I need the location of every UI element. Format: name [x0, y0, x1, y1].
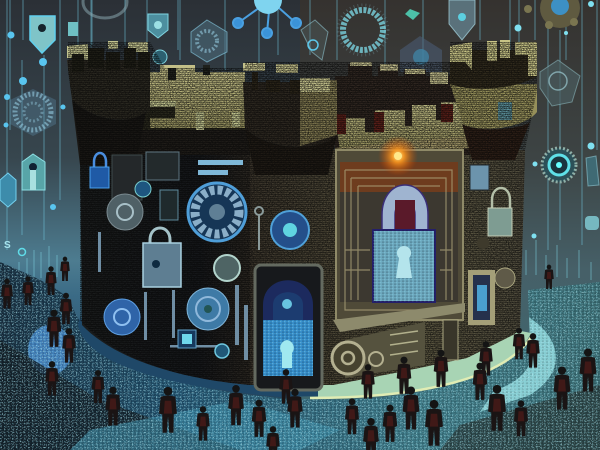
- icon: shield top left: [30, 16, 55, 53]
- icon: cyan gear right: [542, 148, 576, 182]
- icon: dim house hexagon: [400, 36, 442, 72]
- icon: spiral top: [83, 0, 127, 18]
- castle lower wall left: [80, 150, 250, 385]
- platform: castle base: [78, 318, 532, 398]
- left tower: [67, 41, 150, 165]
- icon: emblem top: [405, 9, 420, 20]
- icon: pale gauge: [214, 255, 240, 281]
- icon: ring bottom left: [18, 248, 26, 256]
- castle: fortress structure: [60, 40, 540, 390]
- icon: shield top right: [449, 0, 475, 40]
- icon: cyan network top: [233, 0, 301, 38]
- icon: glowing nodes left: [4, 32, 66, 210]
- icon: mandala left: [10, 89, 56, 136]
- icon: blue disc: [187, 288, 229, 330]
- panel: right wall details: [443, 165, 515, 360]
- skyline bars lower left: [18, 240, 592, 280]
- icon: shields right edge: [585, 156, 599, 230]
- wall upper left: [140, 65, 245, 135]
- icon: big padlock: [373, 185, 435, 302]
- lower wall band under crenels: [82, 130, 250, 155]
- icon: mandala disc: [107, 194, 143, 230]
- icon: left wall padlock blue: [90, 153, 109, 188]
- middle wall upper right: [335, 76, 470, 155]
- icon: blue gear center: [271, 211, 309, 249]
- castle lower wall right: [250, 150, 525, 385]
- icon: orange glow: [378, 136, 418, 176]
- icon: small ring: [215, 344, 229, 358]
- panel: left wall piping: [98, 232, 248, 360]
- icon: grey padlock: [143, 228, 181, 287]
- front crenels right: [335, 102, 468, 150]
- ground: data plaza: [0, 262, 600, 450]
- icon: ring machine: [332, 342, 383, 374]
- icon: letter S: S: [4, 240, 11, 251]
- decorative blue data patch: [28, 325, 72, 375]
- icon: small shield: [68, 22, 78, 36]
- icon: hexagon right: [540, 60, 580, 106]
- icon: hexagon right of ring: [301, 20, 328, 60]
- center tower: [243, 63, 337, 175]
- brick texture: [60, 40, 540, 390]
- icon: wheel gear: [188, 183, 246, 241]
- icon: hexagon top: [191, 20, 227, 62]
- icon: ring small: [153, 50, 167, 64]
- back crenels right: [348, 64, 448, 88]
- people: crowd silhouettes: [1, 257, 596, 450]
- icon: blue disc lower: [104, 299, 140, 335]
- icon: glowing square: [178, 330, 196, 348]
- icon: glowing nodes right: [514, 1, 594, 238]
- icon: small padlock: [488, 188, 512, 236]
- data streams: hanging lines: [7, 0, 597, 250]
- panel: blue door with padlock: [255, 265, 322, 390]
- panel: circuit door with big padlock: [333, 150, 465, 378]
- icon: cyan ring: [338, 5, 388, 55]
- icon: gear top right: [524, 0, 580, 29]
- icon: shield left edge: [0, 173, 16, 207]
- panel: left wall chips: [112, 152, 243, 220]
- right tower: [450, 40, 537, 160]
- icon: shield top middle: [148, 14, 168, 38]
- icon: shield with keyhole: [22, 154, 45, 190]
- icon: key: [255, 207, 263, 250]
